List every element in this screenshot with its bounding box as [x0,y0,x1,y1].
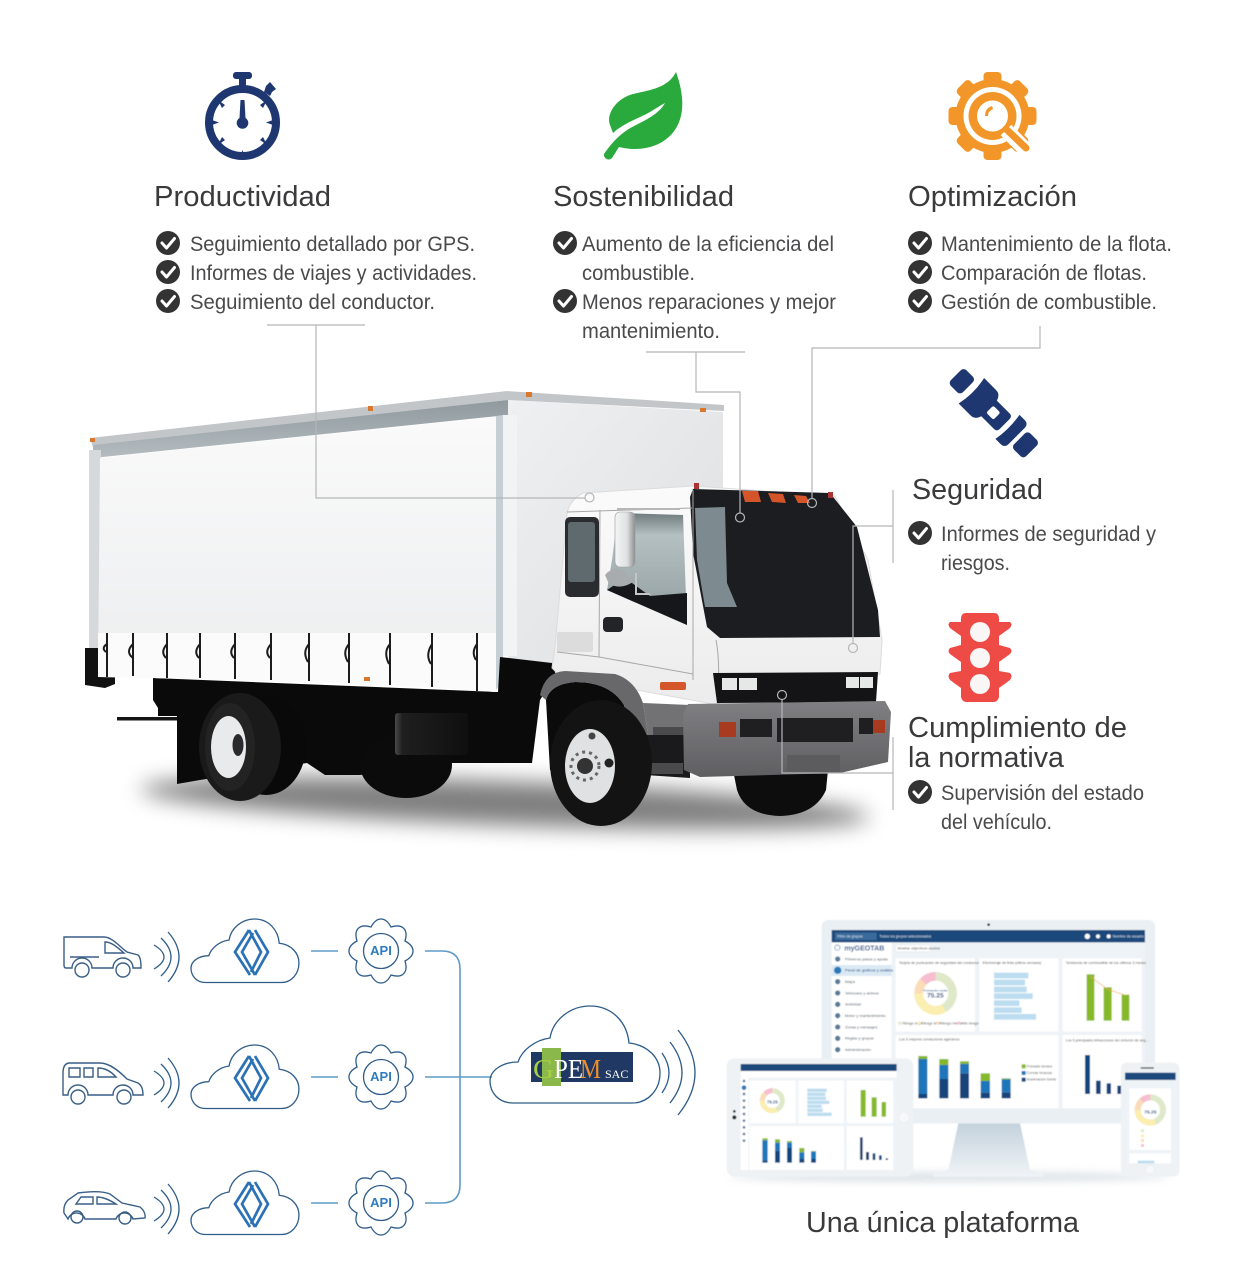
monitor: Vehículos y activos [845,990,879,995]
monitor: Reglas y grupos [845,1036,874,1041]
icon: minivan [63,1063,143,1104]
ground shadow [139,767,871,839]
icon: stopwatch [209,72,276,157]
curtain rail [93,400,508,458]
bullet list: Seguridad [908,521,1156,575]
bullet list: Productividad: Informes de viajes y actividades. [190,262,477,285]
title: Sostenibilidad: Sostenibilidad [553,181,734,213]
monitor: Zonas y mensajes [845,1024,877,1029]
bullet list: Sostenibilidad: mantenimiento. [582,320,720,343]
under-cab dark [640,735,690,778]
box lower white strip [503,415,517,656]
device mockups: single platform [727,920,1179,1182]
caption: Una única plataforma: Una única plataforma [806,1207,1080,1239]
windshield [690,489,880,638]
rear bumper [85,648,115,688]
phone: 75.25 [1144,1110,1157,1116]
monitor: Frenado brusco [1027,1065,1052,1069]
main cloud with GPEM logo [490,1006,660,1103]
chassis [153,657,556,784]
callout: Sostenibilidad [646,352,745,522]
signal arcs: row 1 [154,932,179,982]
device shadow [730,1172,1170,1182]
tablet [727,1058,913,1177]
tablet: 75.25 [767,1100,778,1105]
bullet list: Productividad [156,231,477,314]
monitor [822,920,1155,1177]
bullet list: Optimización [908,231,1172,314]
far wheel [733,770,828,816]
monitor stand [933,1123,1043,1177]
bullet list: Sostenibilidad: combustible. [582,262,695,285]
monitor: Aceleración fuerte [1027,1078,1056,1082]
box rear post [89,450,101,648]
monitor: Alto riesgo [961,1022,979,1026]
monitor: Mostrar objectivos usados [898,947,940,951]
step plates [645,727,685,774]
monitor: Los 5 principales infracciones del cinturón de seg... [1066,1038,1149,1042]
rear wheel [199,693,306,801]
emboss panel [557,632,593,652]
plate area [787,755,840,773]
monitor: Riesgo leve [921,1022,940,1026]
monitor: 75.25 [927,993,944,1000]
monitor: Tendencia de combustible de los últimos 3 meses [1066,961,1146,965]
rear dual wheel [360,732,452,798]
bullet list: Optimización: Gestión de combustible. [941,291,1157,314]
callout: Optimización [808,326,1040,508]
icon: van [64,937,141,977]
heading column: Productividad [154,72,477,314]
monitor: Motor y mantenimiento [845,1013,886,1018]
bullet list: Cumplimiento [908,780,1144,834]
windshield reflection [695,507,737,607]
cloud with diamond logo: row 3 [191,1171,299,1235]
bullet list: Sostenibilidad: Aumento de la eficiencia del [582,233,834,256]
callout: Cumplimiento [778,690,893,810]
signal arcs: main cloud [662,1030,695,1115]
cab body [552,486,882,704]
icon: gear with magnifier [948,72,1036,160]
box front post [496,415,503,690]
visor lights [742,491,810,503]
title: Productividad: Productividad [154,181,331,213]
bullet list: Sostenibilidad: Menos reparaciones y mejor [582,291,836,314]
side mirror [605,509,680,594]
cloud with diamond logo: row 2 [191,1045,299,1109]
curtain lower flap [98,633,496,692]
title: Seguridad: Seguridad [912,474,1043,506]
monitor: Todos los grupos seleccionados [879,935,931,939]
curtain [98,417,496,692]
truck illustration [85,391,891,839]
API gear: row 1: API [370,943,392,958]
icon: seatbelt [943,362,1044,464]
wheel arch dark [546,682,640,770]
API gear: row 1 [349,919,413,983]
box roof rim [90,391,724,447]
door seams [557,490,719,695]
cloud with diamond logo: row 1 [191,919,299,983]
bullet list: Sostenibilidad [553,231,836,343]
bullet list: Seguridad: riesgos. [941,552,1010,575]
monitor: Mapa [845,979,856,984]
monitor: Kilometraje de flota (último semana) [983,961,1041,965]
grille band [713,672,878,703]
bullet list: Productividad: Seguimiento detallado por GPS. [190,233,475,256]
door window [607,513,687,625]
signal arcs: row 2 [154,1058,179,1108]
logo: GPEM SAC: G [533,1054,554,1084]
monitor: Los 5 mejores conductores agresivos [899,1038,960,1042]
API gear: row 3 [349,1171,413,1235]
fog lamps [719,720,885,737]
icon: leaf [604,72,682,159]
monitor: Filtro de grupos [837,935,863,939]
logo: GPEM SAC: M [580,1054,601,1084]
connector lines [311,951,492,1203]
title: Cumplimiento de la normativa [908,712,1127,774]
monitor: Primeros pasos y ayuda [845,956,889,961]
bumper recesses [740,718,873,742]
roof beacons [694,483,833,498]
callout lines and anchor dots [267,325,1040,810]
phone [1121,1063,1179,1177]
monitor: Nombre de usuario [1113,935,1144,939]
title: Cumplimiento de la normativa: Cumplimiento de [908,712,1127,744]
bullet list: Productividad: Seguimiento del conductor. [190,291,435,314]
callout: Productividad [267,325,594,502]
callout: Seguridad [848,490,893,652]
bullet list: Cumplimiento: del vehículo. [941,811,1052,834]
bullet list: Seguridad: Informes de seguridad y [941,523,1156,546]
monitor: Actividad [845,1002,861,1007]
logo: GPEM SAC: PE [554,1054,583,1084]
curtain straps [104,633,477,691]
underride bar [117,717,177,720]
signal arcs: row 3 [154,1184,179,1234]
fender [540,671,648,735]
under-cab panel [643,703,690,735]
icon: car [64,1192,145,1224]
bullet list: Optimización: Mantenimiento de la flota. [941,233,1172,256]
API gear: row 2: API [370,1069,392,1084]
headlights [722,677,873,690]
fuel tank [395,713,468,755]
monitor: Curvas bruscas [1027,1071,1052,1075]
monitor: Panel de gráficos y análisis [845,968,893,973]
bumper [683,701,891,777]
turn signal [660,682,686,690]
monitor: Administración [845,1047,871,1052]
icon: traffic light [948,613,1012,702]
block: Cumplimiento de la normativa [908,613,1144,834]
bullet list: Cumplimiento: Supervisión del estado [941,782,1144,805]
cargo box side panel [508,400,723,668]
logo: GPEM SAC: SAC [605,1067,628,1081]
monitor: myGEOTAB [844,945,884,952]
API gear: row 2 [349,1045,413,1109]
monitor: Puntuación media [923,988,948,992]
logo: GPEM SAC [531,1048,633,1086]
API gear: row 3: API [370,1195,392,1210]
monitor: Riesgo medio [940,1022,962,1026]
marker lights [90,392,706,681]
rear side window [565,517,599,597]
block: Seguridad [908,362,1156,575]
heading column: Optimización [908,72,1172,314]
door handle [603,617,623,632]
front wheel [550,700,652,826]
heading column: Sostenibilidad [553,72,836,343]
data flow diagram: vehicles to cloud [63,919,695,1235]
monitor: Riesgo bajo [902,1022,922,1026]
title: Cumplimiento de la normativa: la normativa [908,742,1065,774]
bullet list: Optimización: Comparación de flotas. [941,262,1147,285]
monitor: Tarjeta de puntuación de seguridad del conductor [899,961,980,965]
title: Optimización: Optimización [908,181,1077,213]
